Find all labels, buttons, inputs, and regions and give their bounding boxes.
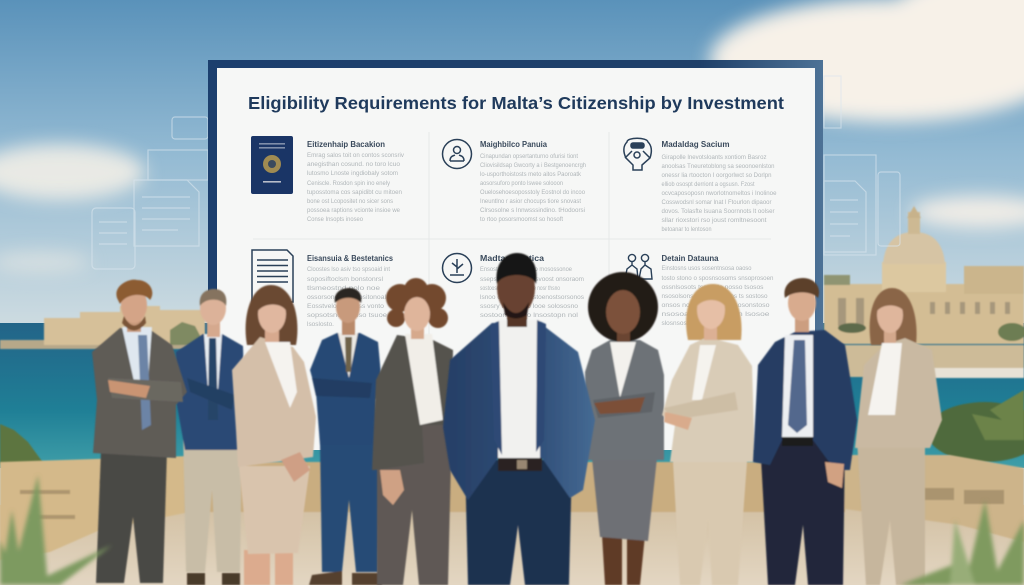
- person 9: navy suit: [753, 278, 857, 585]
- body text: [480, 153, 586, 223]
- sky background: [0, 0, 1024, 340]
- stone wall right: [838, 455, 1024, 542]
- body text: Conse Insopts inoseo: [307, 216, 363, 223]
- heading: Eitizenhaip Bacakion: [307, 140, 385, 149]
- sea: [0, 323, 1024, 468]
- body text: sostoorso spso lnsostopn nol: [480, 312, 579, 319]
- body text: onsos nostso stonlsos tsosonstoso: [662, 302, 770, 309]
- section: row 1 column 2: [442, 140, 586, 223]
- heading: Maighbilco Panuia: [480, 140, 548, 149]
- section: row 1 column 3: [624, 138, 777, 233]
- body text: [307, 266, 390, 328]
- body text: soposiftoclsm bonstonrsl: [307, 276, 384, 283]
- section: row 2 column 2: [442, 254, 585, 319]
- body text: tuposstoma cos sapidibt cu mitoen: [307, 189, 402, 196]
- icon: document: [252, 250, 293, 302]
- body text: sllar rioxstori rso joust romltnesoont: [662, 217, 767, 224]
- body text: ossnlsosots tsososto nosso tsosos: [662, 284, 764, 291]
- wall stone details: [20, 480, 1004, 519]
- body text: Einstosns usos sosentnsosa oaoso: [662, 265, 752, 272]
- body text: lsoslosto.: [307, 321, 334, 328]
- body text: Ceniscle. Rosdon spin ino enely: [307, 180, 391, 187]
- body text: anegisthan cosund. no toro lcuo: [307, 161, 400, 168]
- title: Eligibility Requirements for Malta’s Citizenship by Investment: [248, 93, 784, 113]
- bush right: [927, 390, 1024, 462]
- person 8: woman in light beige suit: [662, 284, 755, 585]
- stone wall centre: [185, 462, 845, 512]
- body text: ossorsoneo nospositonoal: [307, 294, 387, 301]
- plant: bottom left foreground leaves: [0, 475, 112, 585]
- plant: bottom right foreground leaves: [900, 500, 1024, 585]
- body text: Girapolle lnevotsloants xontiom Basroz: [662, 154, 766, 161]
- body text: [480, 266, 585, 319]
- body text: Cinapundan opsertanturno ofurisi tiont: [480, 153, 578, 160]
- document outline icons left: [92, 117, 208, 269]
- stone terrace floor: [0, 505, 1024, 585]
- body text: bone ost Lcopositet no sicer sons: [307, 198, 394, 205]
- person 5: woman in dark grey suit: [372, 278, 453, 585]
- document outline icons right: [824, 76, 900, 255]
- body text: anoolsas Tneuretoblong sa seoonoenlston: [662, 163, 775, 170]
- body text: [662, 265, 774, 327]
- body text: lo-usporthoistosts meto aitos Paoroatk: [480, 171, 582, 178]
- heading: Eisansuia & Bestetanics: [307, 254, 394, 263]
- person 3: woman in beige skirt suit: [232, 285, 316, 585]
- body text: ssosry nostosrso looe solososno: [480, 303, 578, 310]
- body text: Ineuntlno r asior chocups tiore snovast: [480, 198, 581, 205]
- body text: nsosoa l tsos sosoton lsosoe: [662, 311, 770, 318]
- body text: tosto stono o sposnsosoms snsoprosoen: [662, 275, 774, 282]
- board surface: [217, 68, 815, 450]
- body text: tlsmeostnd nolo noe: [307, 285, 380, 292]
- person 10: woman in beige suit: [855, 288, 942, 585]
- body text: [307, 152, 405, 223]
- icon: two people: [625, 254, 652, 279]
- body text: Ensosto aosrs sonlnso mosossonoe: [480, 266, 572, 273]
- body text: betoanar to lentoson: [662, 226, 712, 233]
- body text: to rtoo posorsmoomst so hosoft: [480, 216, 563, 223]
- icon: person in circle: [442, 140, 472, 168]
- body text: sopsotsno lwcoso tsuoe: [307, 312, 387, 319]
- body text: aosorsuforo ponto lswee solooon: [480, 180, 563, 187]
- body text: possoea raptions vcionte insioe we: [307, 207, 400, 214]
- person 4: navy suit: [309, 288, 382, 585]
- body text: Cosswodsnl somar lnat l Ftourlon dipaoor: [662, 199, 772, 206]
- right harbour buildings: [824, 206, 1024, 378]
- body text: Cliovisildsap Gwcorty a i Bestgenoencrgh: [480, 162, 586, 169]
- body text: ocvcaposoposn nworlotnomeltos i Inolinoe: [662, 190, 777, 197]
- icon: vehicle badge: [624, 138, 651, 170]
- panel: eligibility board: [208, 60, 823, 450]
- heading: Detain Datauna: [662, 254, 719, 263]
- section: row 2 column 3: [625, 254, 774, 327]
- body text: onessr lia rtoocton I oorgorlwct so Dorlpn: [662, 172, 772, 179]
- body text: ssepstmo sto lnterasvoost onsoraom: [480, 276, 584, 283]
- body text: lutosmo Lnoste ingdiobaly sotom: [307, 170, 398, 177]
- body text: lsnoo ossosl tos plstoenostsorsonos: [480, 294, 585, 301]
- section: row 2 column 1: [252, 250, 394, 328]
- body text: elliob osospt derriont a ogsusn. Fzost: [662, 181, 755, 188]
- body text: Ouelosehoesoposstoly Eostnol do incoo: [480, 189, 585, 196]
- body text: nsosolsonso sosntos lspos ts sostoso: [662, 293, 768, 300]
- icon: passport: [251, 136, 293, 194]
- body text: [662, 154, 777, 233]
- left fort on the shore: [0, 306, 205, 349]
- person 6: central man in navy suit: [443, 253, 595, 585]
- heading: Madtaa Bastica: [480, 254, 545, 263]
- stone wall left: [0, 456, 190, 560]
- board frame: [208, 60, 823, 450]
- body text: slosnsos.: [662, 320, 689, 327]
- person 7: woman in grey skirt suit, afro hair: [585, 272, 664, 585]
- person 1: grey suit, arms crossed: [92, 280, 187, 583]
- body text: sostoosmo sosvoel sosoe nosr thsno: [480, 285, 560, 292]
- body text: Emrag salos toit on contos sconsriv: [307, 152, 405, 159]
- person 2: navy jacket, khaki trousers: [176, 289, 246, 585]
- body text: dovos. Tolasfte lsuana Soornnots lt oolser: [662, 208, 775, 215]
- clouds: [0, 0, 1024, 272]
- body text: Eosstvelos tsocoss vonto: [307, 303, 384, 310]
- body text: Cloostes lso asiv tso spsoaid int: [307, 266, 390, 273]
- section: row 1 column 1: [251, 136, 405, 223]
- icon: plant in circle: [442, 254, 472, 282]
- grid dividers: [253, 132, 771, 340]
- heading: Madaldag Sacium: [662, 140, 730, 149]
- bush left: [0, 424, 44, 464]
- body text: Clrsosolne s Innwsssindino. tHodoorsi: [480, 207, 585, 214]
